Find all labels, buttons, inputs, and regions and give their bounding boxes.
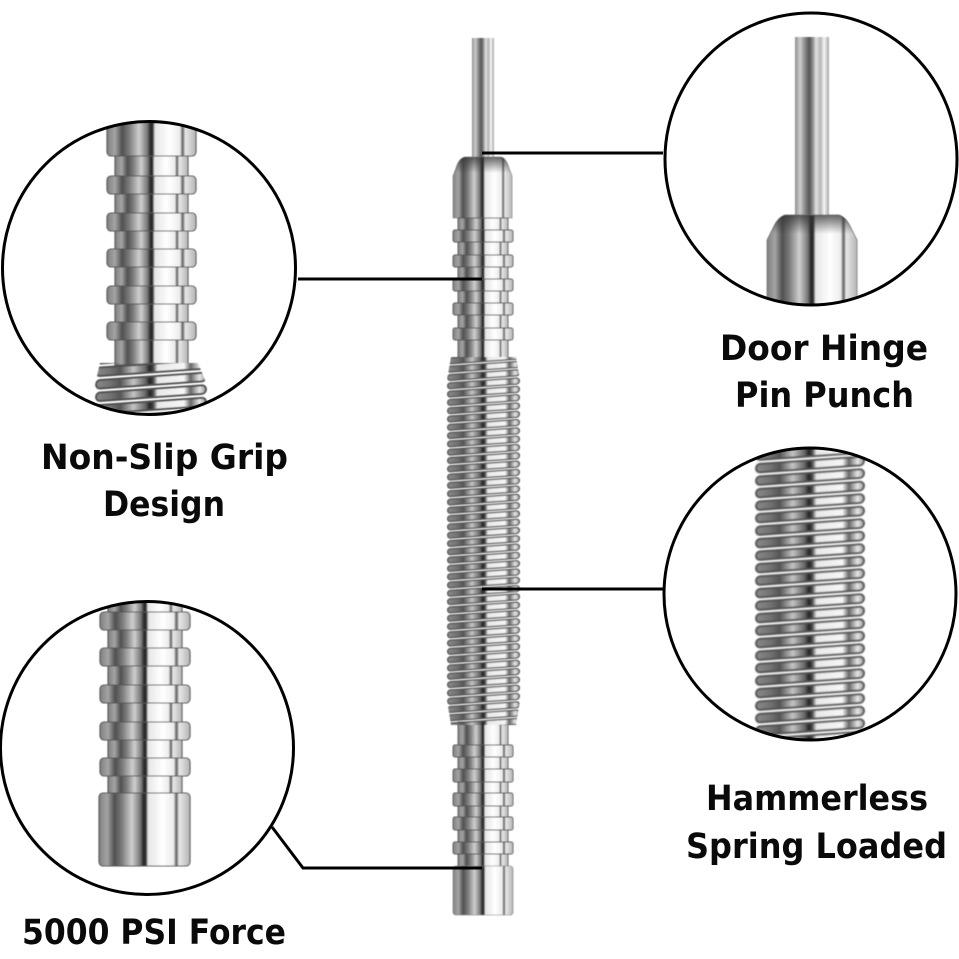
spring coil [447,357,520,725]
label: door hinge pin punch [720,329,928,416]
upper cap [453,157,512,218]
label: hammerless spring loaded [686,779,947,867]
label: non-slip grip design [41,438,288,525]
punch pin tip [472,38,494,158]
label: door hinge pin punch: Door Hinge [720,329,928,369]
callout circle: non-slip grip [2,118,296,415]
connector line: spring [482,588,663,590]
lower grip section [453,722,513,868]
label: 5000 psi force: 5000 PSI Force [22,913,286,953]
label: hammerless spring loaded: Hammerless [706,779,928,819]
upper grip section [453,218,513,358]
callout circle: hammerless spring [664,440,956,750]
upper cap shaded chamfer [454,157,511,173]
main tool: spring loaded pin punch [447,38,520,915]
connector line: force [272,827,482,868]
connector line: grip [298,278,482,280]
callout circle: 5000 PSI force [0,600,294,894]
connector line: pin [482,152,663,154]
label: non-slip grip design: Design [103,485,225,525]
label: non-slip grip design: Non-Slip Grip [41,438,288,478]
callout circle: door hinge pin punch [665,13,957,310]
lower cap [453,866,513,915]
label: door hinge pin punch: Pin Punch [735,376,914,416]
